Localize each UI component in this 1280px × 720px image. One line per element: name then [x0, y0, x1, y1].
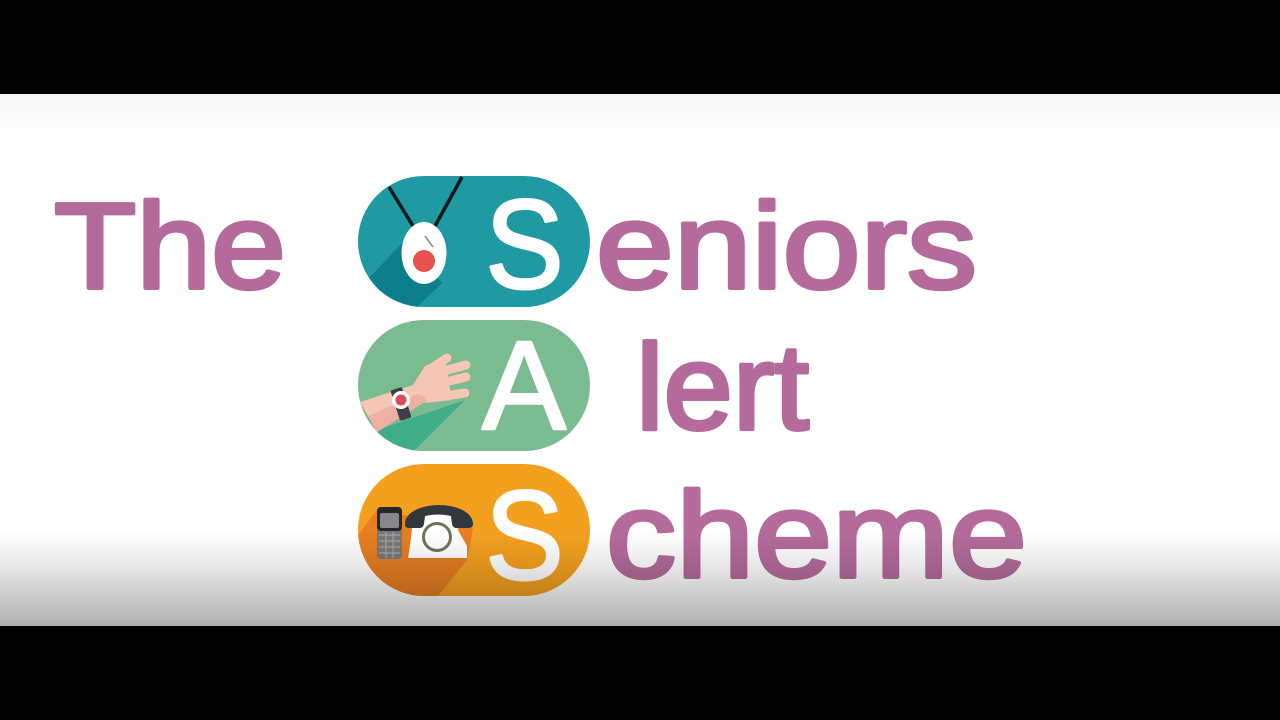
- letter S: S: [486, 174, 564, 315]
- letter S: S: [486, 465, 564, 606]
- pendant cord: [389, 177, 462, 226]
- badge: green wrist S: [358, 315, 590, 456]
- word: cheme: cheme: [606, 467, 1027, 603]
- icon: arm with alarm watch: [360, 358, 466, 432]
- pendant long shadow: [369, 242, 442, 307]
- badge: teal pendant S: [358, 176, 590, 307]
- arm long shadow: [376, 400, 465, 450]
- word: The: The: [54, 178, 286, 314]
- white background panel: [0, 94, 1280, 626]
- icon: mobile phone: [377, 507, 402, 559]
- bottom grey fade overlay: [0, 532, 1280, 626]
- phones long shadow: [358, 510, 473, 596]
- word: eniors: eniors: [596, 178, 977, 314]
- word: lert: lert: [636, 319, 809, 455]
- icon: desk telephone: [405, 505, 473, 558]
- icon: pendant alarm: [402, 222, 446, 284]
- letter A: A: [482, 315, 566, 456]
- badge: orange phones S: [358, 464, 590, 596]
